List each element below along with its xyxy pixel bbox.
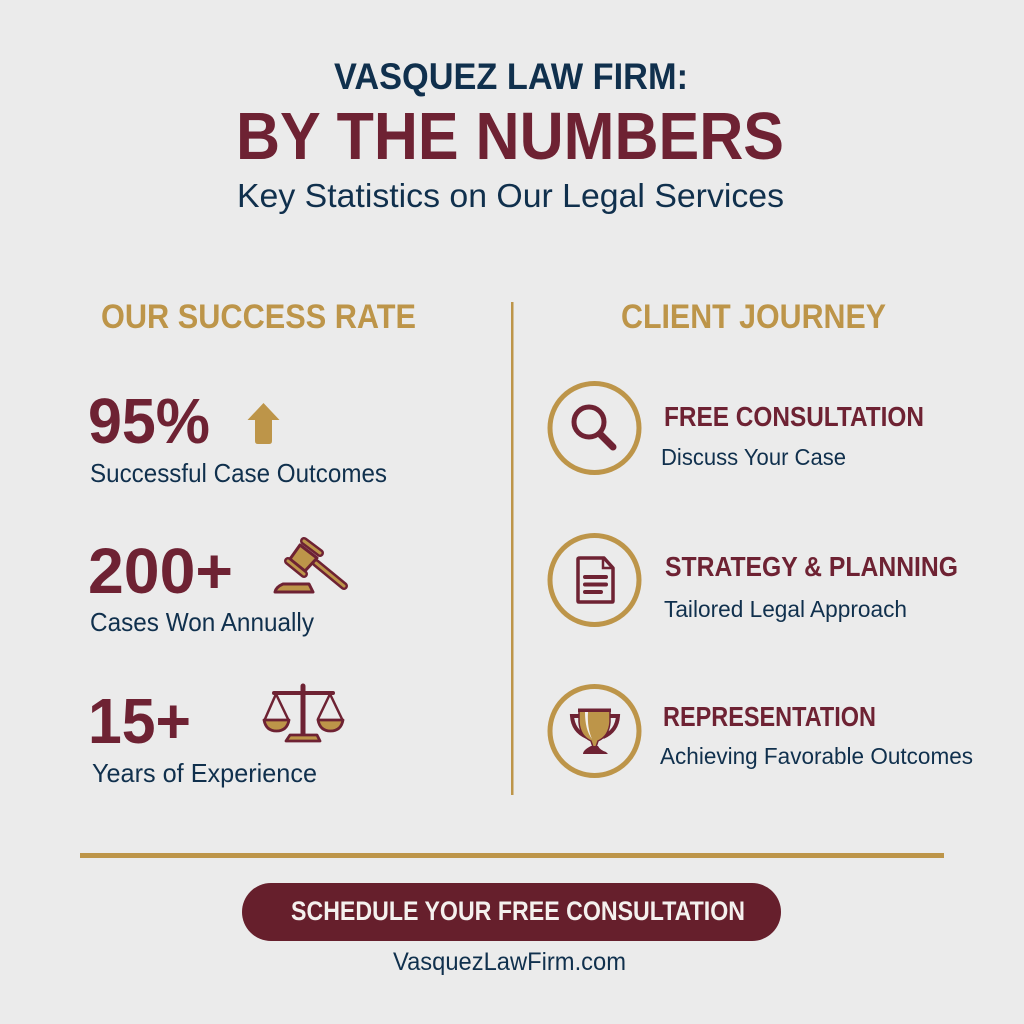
title: by the numbers: BY THE NUMBERS — [236, 99, 784, 174]
header — [236, 55, 784, 215]
label: years of experience: Years of Experience — [92, 758, 317, 788]
divider: horizontal — [80, 853, 944, 858]
step title: representation: REPRESENTATION — [663, 701, 876, 732]
icon: document in ring — [550, 536, 639, 624]
heading: our success rate: OUR SUCCESS RATE — [101, 298, 416, 336]
stat: 200 plus: 200+ — [88, 535, 233, 607]
website url: VasquezLawFirm.com — [393, 948, 626, 976]
step text: achieving favorable outcomes: Achieving Favorable Outcomes — [660, 743, 973, 769]
step title: free consultation: FREE CONSULTATION — [664, 401, 924, 432]
step text: tailored legal approach: Tailored Legal Approach — [664, 596, 907, 622]
label: successful case outcomes: Successful Case Outcomes — [90, 458, 387, 488]
panel: our success rate — [88, 298, 416, 788]
icon: gavel — [275, 541, 344, 592]
divider: vertical — [511, 302, 514, 795]
icon: up arrow — [248, 403, 280, 444]
heading: client journey: CLIENT JOURNEY — [621, 298, 886, 336]
icon: scales of justice — [264, 686, 343, 741]
label: cases won annually: Cases Won Annually — [90, 607, 314, 637]
stat: 95 percent: 95% — [88, 385, 210, 457]
title: firm name: VASQUEZ LAW FIRM: — [334, 55, 688, 97]
icon: trophy in ring — [550, 686, 639, 776]
panel: client journey — [550, 298, 973, 776]
call to action button — [242, 883, 781, 941]
step text: discuss your case: Discuss Your Case — [661, 444, 846, 470]
icon: magnifying glass in ring — [550, 384, 639, 472]
step title: strategy and planning: STRATEGY & PLANNING — [665, 551, 958, 582]
stat: 15 plus: 15+ — [88, 685, 191, 757]
subtitle: Key Statistics on Our Legal Services — [237, 178, 784, 215]
call to action button: SCHEDULE YOUR FREE CONSULTATION — [291, 896, 745, 926]
